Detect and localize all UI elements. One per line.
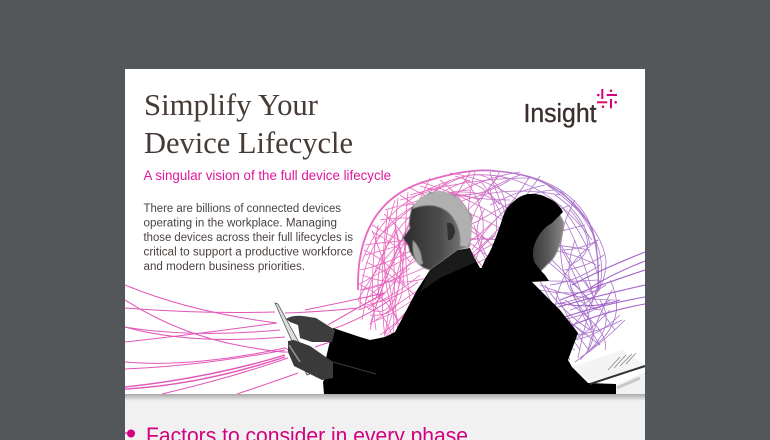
intro paragraph: those devices across their full lifecycles is bbox=[144, 232, 353, 244]
intro paragraph: There are billions of connected devices bbox=[144, 203, 341, 215]
infographic cover bbox=[125, 69, 646, 440]
intro paragraph: and modern business priorities. bbox=[144, 261, 305, 273]
subtitle: A singular vision of the full device lifecycle bbox=[144, 168, 391, 183]
intro paragraph: critical to support a productive workforce bbox=[144, 246, 353, 258]
man beard highlight bbox=[413, 240, 423, 264]
sweeping lines left bbox=[125, 285, 390, 394]
globe of tangled lines bbox=[358, 170, 625, 362]
icon: logo mark bbox=[597, 89, 617, 108]
white hero panel bbox=[125, 69, 645, 394]
man collar bbox=[420, 248, 476, 292]
grey lower panel bbox=[125, 394, 645, 440]
man lower hand holding tablet bbox=[288, 340, 333, 380]
title: Simplify Your bbox=[144, 87, 319, 122]
man upper hand on tablet bbox=[286, 316, 335, 342]
title bbox=[144, 87, 353, 160]
woman face bbox=[520, 205, 564, 272]
laptop and papers bbox=[572, 350, 645, 394]
intro paragraph bbox=[144, 203, 353, 273]
intro paragraph: operating in the workplace. Managing bbox=[144, 218, 337, 230]
sweeping lines right bbox=[558, 252, 645, 326]
silhouette: man and woman back to back bbox=[323, 250, 616, 394]
icon: bullet bbox=[125, 430, 135, 438]
man ear bbox=[447, 223, 455, 240]
woman hair bbox=[480, 194, 563, 290]
logo: Insight bbox=[524, 89, 617, 128]
tablet bbox=[275, 303, 315, 375]
man head bbox=[403, 191, 472, 270]
logo: Insight: Insight bbox=[524, 100, 596, 128]
title: Device Lifecycle bbox=[144, 125, 353, 160]
man hair bbox=[412, 191, 472, 247]
sleeve cuff edge bbox=[333, 362, 376, 374]
